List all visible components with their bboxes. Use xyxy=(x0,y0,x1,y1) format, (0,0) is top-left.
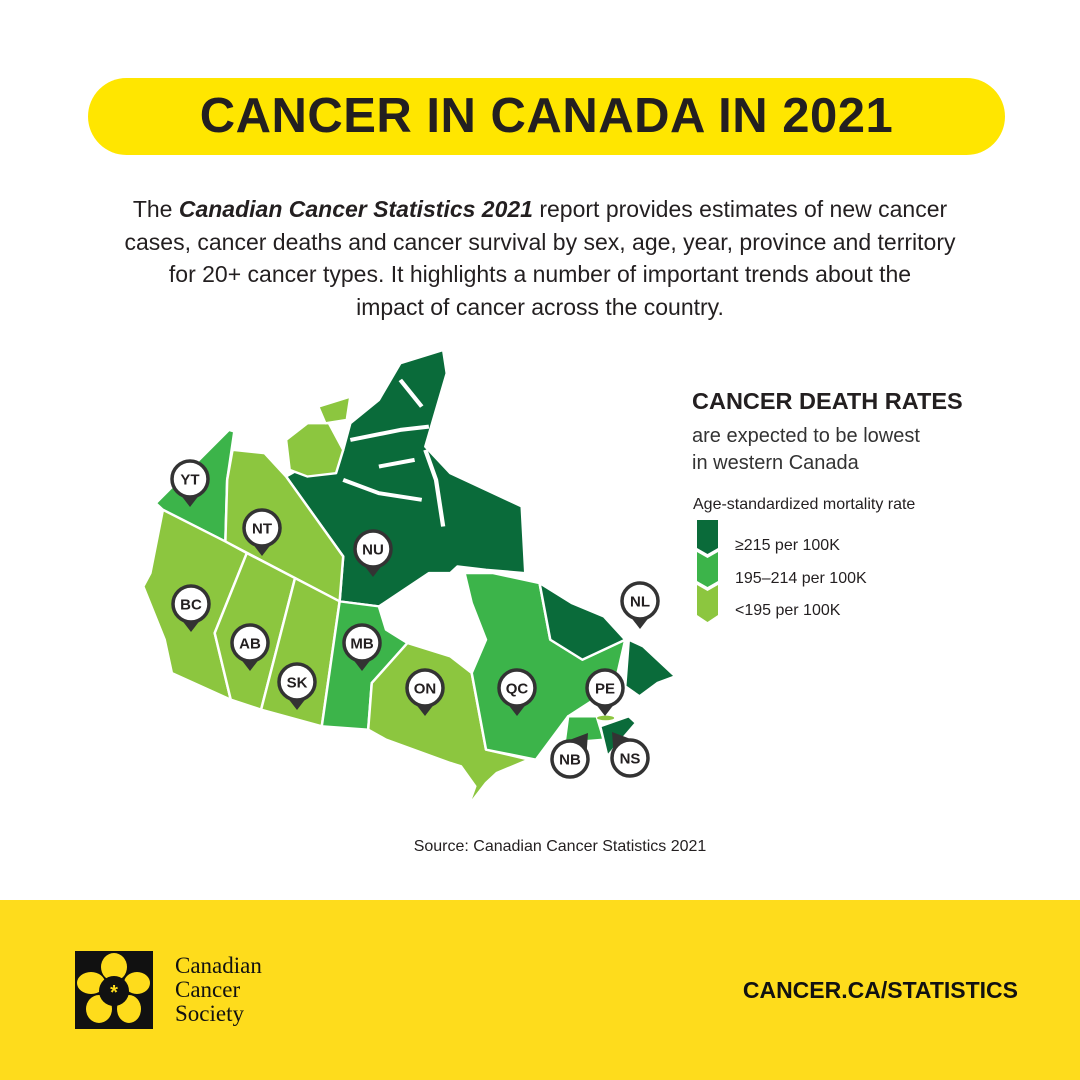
region: NS xyxy=(600,716,636,756)
pin: ON xyxy=(407,670,443,716)
pin: QC xyxy=(499,670,535,716)
legend labels: ≥215 per 100K xyxy=(735,537,840,554)
pin: ON: ON xyxy=(414,680,436,698)
pin: AB: AB xyxy=(239,636,261,652)
source note: Source: Canadian Cancer Statistics 2021 xyxy=(414,838,706,855)
region: QC xyxy=(465,573,625,760)
pin: NU: NU xyxy=(362,542,384,558)
pin: PE xyxy=(587,670,623,716)
legend swatches xyxy=(697,520,718,622)
region: ON xyxy=(368,643,529,806)
website url: CANCER.CA/STATISTICS xyxy=(743,977,1018,1003)
intro paragraph: The Canadian Cancer Statistics 2021 report provides estimates of new cancer xyxy=(133,196,947,222)
pin: MB: MB xyxy=(350,636,374,652)
intro paragraph: impact of cancer across the country. xyxy=(356,294,724,320)
pin: QC: QC xyxy=(506,680,528,698)
legend heading: CANCER DEATH RATES xyxy=(692,388,963,414)
pin: NU xyxy=(355,531,391,577)
legend labels: <195 per 100K xyxy=(735,602,840,619)
legend labels xyxy=(735,537,867,619)
pin: NT xyxy=(244,510,280,556)
region: BC xyxy=(143,510,247,700)
logo text: Society xyxy=(175,1001,244,1026)
legend panel xyxy=(692,388,963,622)
pin: NB xyxy=(552,733,588,777)
logo icon: * xyxy=(110,982,118,1004)
region: AB xyxy=(215,553,295,710)
region: PE xyxy=(597,715,615,721)
channels xyxy=(343,380,443,526)
region: Nunavut xyxy=(286,350,525,606)
pin: NL xyxy=(622,583,658,629)
pin: NS xyxy=(612,732,648,776)
pin: NB: NB xyxy=(559,752,581,768)
region: Yukon xyxy=(156,430,234,541)
region: NB xyxy=(565,716,604,743)
pin: AB xyxy=(232,625,268,671)
legend subheading xyxy=(692,425,920,474)
pin: SK xyxy=(279,664,315,710)
logo text xyxy=(175,953,262,1026)
pin: BC: BC xyxy=(180,596,202,614)
title banner: CANCER IN CANADA IN 2021 xyxy=(200,89,893,143)
pin: PE: PE xyxy=(595,680,615,698)
pin: NS: NS xyxy=(620,750,640,768)
logo icon xyxy=(75,951,153,1029)
pin: SK: SK xyxy=(287,674,308,692)
pin: BC xyxy=(173,586,209,632)
region: NL xyxy=(540,583,675,696)
pin: YT: YT xyxy=(180,472,200,488)
legend subheading: in western Canada xyxy=(692,452,859,474)
region: Northwest Territories xyxy=(225,397,350,601)
legend scale title: Age-standardized mortality rate xyxy=(693,496,915,513)
pin: YT xyxy=(172,461,208,507)
title banner xyxy=(88,78,1005,155)
legend labels: 195–214 per 100K xyxy=(735,570,867,586)
pin: NT: NT xyxy=(252,520,272,538)
pin: MB xyxy=(344,625,380,671)
logo text: Canadian xyxy=(175,953,262,978)
region: SK xyxy=(261,578,340,726)
intro paragraph xyxy=(124,196,956,320)
logo text: Cancer xyxy=(175,977,240,1002)
footer band xyxy=(0,900,1080,1080)
intro paragraph: cases, cancer deaths and cancer survival by sex, age, year, province and territory xyxy=(124,228,955,254)
region: MB xyxy=(322,601,407,730)
intro paragraph: for 20+ cancer types. It highlights a number of important trends about the xyxy=(169,261,911,287)
pin: NL: NL xyxy=(630,594,650,610)
legend subheading: are expected to be lowest xyxy=(692,425,920,447)
